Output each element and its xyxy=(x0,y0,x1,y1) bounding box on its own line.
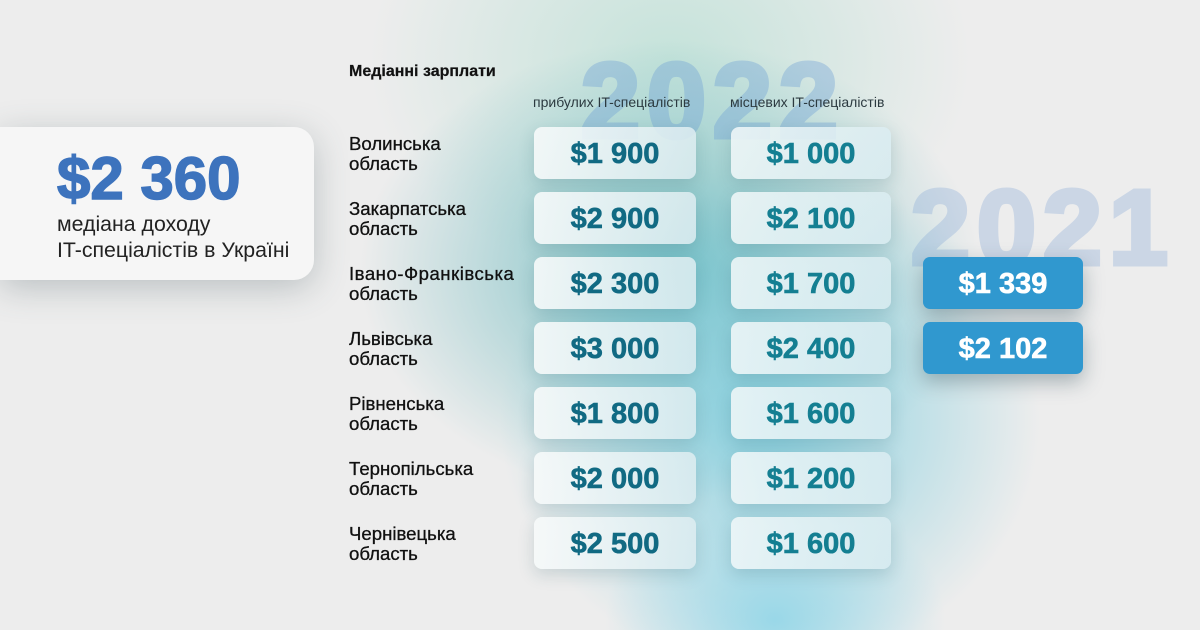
region label: Рівненська xyxy=(349,393,444,414)
big number: $2 360 xyxy=(57,145,241,212)
value xyxy=(731,517,891,569)
region label xyxy=(349,328,433,368)
value: $3 000 xyxy=(571,333,659,365)
region label: область xyxy=(349,348,418,368)
value: $1 600 xyxy=(767,528,855,560)
column header: locals: місцевих IT-спеціалістів xyxy=(730,94,884,110)
value: $2 000 xyxy=(571,463,659,495)
region label: область xyxy=(349,542,418,564)
value: $1 800 xyxy=(571,398,659,430)
value xyxy=(534,192,696,244)
value xyxy=(534,452,696,504)
value 2021 xyxy=(923,257,1083,309)
column header: arrivals: прибулих IT-спеціалістів xyxy=(533,94,690,110)
region label: Івано-Франківська xyxy=(349,263,514,284)
value: $2 100 xyxy=(767,203,855,235)
year label 2021: 2021 xyxy=(911,169,1175,287)
region label: область xyxy=(349,218,418,238)
region label: Львівська xyxy=(349,328,432,349)
value: $2 500 xyxy=(571,528,659,560)
value 2021: $2 102 xyxy=(959,333,1047,365)
region label: область xyxy=(349,282,418,304)
region label: Чернівецька xyxy=(349,523,456,544)
value xyxy=(534,127,696,179)
description xyxy=(57,212,289,262)
value: $2 900 xyxy=(571,203,659,235)
region label xyxy=(349,393,444,434)
region label xyxy=(349,133,441,174)
value xyxy=(534,257,696,309)
value xyxy=(731,192,891,244)
region label xyxy=(349,198,466,238)
region label: Волинська xyxy=(349,133,441,154)
value: $1 900 xyxy=(571,138,659,170)
value xyxy=(731,257,891,309)
value: $1 700 xyxy=(767,268,855,300)
region label xyxy=(349,523,456,564)
heading: Медіанні зарплати xyxy=(349,63,496,80)
region label: Тернопільська xyxy=(349,458,473,479)
value xyxy=(731,452,891,504)
region label xyxy=(349,458,474,498)
value xyxy=(731,387,891,439)
value xyxy=(534,322,696,374)
value: $2 300 xyxy=(571,268,659,300)
value xyxy=(731,127,891,179)
value: $1 600 xyxy=(767,398,855,430)
value 2021 xyxy=(923,322,1083,374)
description: IT-спеціалістів в Україні xyxy=(57,238,289,262)
value: $1 000 xyxy=(767,138,855,170)
value: $2 400 xyxy=(767,333,855,365)
panel: national median income xyxy=(0,127,314,280)
region label: Закарпатська xyxy=(349,198,466,219)
value xyxy=(534,517,696,569)
region label: область xyxy=(349,152,418,174)
region label xyxy=(349,263,514,304)
value xyxy=(731,322,891,374)
description: медіана доходу xyxy=(57,212,210,236)
region label: область xyxy=(349,412,418,434)
region label: область xyxy=(349,478,418,498)
year label 2022: 2022 xyxy=(581,42,845,160)
value: $1 200 xyxy=(767,463,855,495)
value xyxy=(534,387,696,439)
value 2021: $1 339 xyxy=(959,268,1047,300)
